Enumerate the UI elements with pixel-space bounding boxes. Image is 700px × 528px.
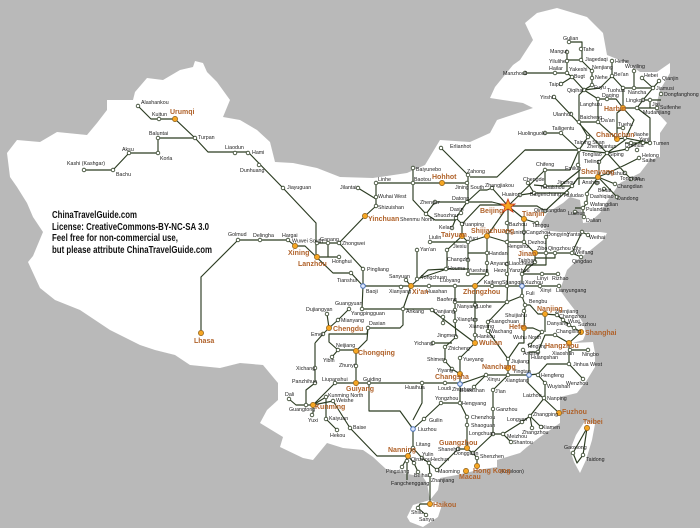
station labels: Shimen xyxy=(427,357,445,363)
station labels: Qianjin xyxy=(662,76,679,82)
station labels: Shenzhen xyxy=(480,454,504,460)
station labels: Qinhuangdao xyxy=(534,208,566,214)
station labels: Weifang xyxy=(574,250,593,256)
major city labels: Jinan xyxy=(518,251,536,258)
major city labels: Xining xyxy=(288,250,309,257)
station labels: Maoming xyxy=(438,469,460,475)
station labels: Fuyu xyxy=(594,85,606,91)
major city labels: Chongqing xyxy=(358,350,395,357)
license note: ChinaTravelGuide.com xyxy=(52,209,137,221)
station labels: Anshan xyxy=(582,180,600,186)
station labels: Zhenglantun xyxy=(587,144,617,150)
station labels: Helong xyxy=(642,153,659,159)
station labels: Yantai xyxy=(567,232,582,238)
station labels: Tuehu xyxy=(618,122,633,128)
station labels: Handan xyxy=(489,251,508,257)
station labels: Guiding xyxy=(363,377,381,383)
station labels: Meizhou xyxy=(507,434,527,440)
station labels: Dujiangyan xyxy=(306,307,333,313)
rail lines: north china xyxy=(362,148,598,343)
station labels: Nancha xyxy=(628,90,646,96)
station labels: Hekou xyxy=(330,433,345,439)
license note xyxy=(52,209,212,256)
station labels: Yiyang xyxy=(437,368,453,374)
station labels: Fangchenggang xyxy=(391,481,429,487)
station labels: Tanggu xyxy=(532,223,549,229)
station labels: Xichang xyxy=(296,366,315,372)
station labels: Taishan xyxy=(518,258,536,264)
station labels: Yanzhou xyxy=(509,268,530,274)
station labels: Nanyang xyxy=(457,304,478,310)
station labels: Weihai xyxy=(589,235,605,241)
station labels: Jiamusi xyxy=(656,86,674,92)
station labels: Taipi xyxy=(549,82,560,88)
station labels: Taiping Shan xyxy=(574,140,605,146)
station labels: Emilun xyxy=(565,166,581,172)
major city labels: Haikou xyxy=(433,502,456,509)
rail lines: northeast xyxy=(525,42,661,217)
station labels: Dunhuang xyxy=(240,168,265,174)
station labels: Xiangyang xyxy=(469,324,494,330)
station labels: Jiagedaqi xyxy=(585,57,608,63)
station labels: Huaihua xyxy=(405,385,425,391)
major city labels: Hefei xyxy=(509,324,526,331)
station labels: Daqing xyxy=(602,93,619,99)
station labels: Tongchuan xyxy=(421,275,447,281)
station labels: (Kowloon) xyxy=(500,469,524,475)
station labels: Ankang xyxy=(406,309,424,315)
station labels: Xianyang xyxy=(389,289,411,295)
station labels: Zhanjiang xyxy=(431,478,454,484)
station labels: Huashan xyxy=(426,289,447,295)
station labels: Hami xyxy=(252,150,264,156)
station labels: Liulin xyxy=(429,235,441,241)
station labels: Beitai xyxy=(598,188,611,194)
station labels: Wuxi xyxy=(568,319,580,325)
major city labels: Changchun xyxy=(596,132,634,139)
station labels: Guangyuan xyxy=(335,301,362,307)
station labels: Yebaishou xyxy=(540,185,565,191)
station labels: Nehe xyxy=(595,75,608,81)
station labels: Luohe xyxy=(477,304,492,310)
station labels: Xiangfan xyxy=(457,317,478,323)
station labels: Tieling xyxy=(584,159,599,165)
station labels: Xiangtang xyxy=(505,378,529,384)
station labels: Wuhu North xyxy=(513,335,541,341)
station labels: Wuyishan xyxy=(547,384,570,390)
station labels: Lianyungang xyxy=(556,288,586,294)
station labels: Rizhao xyxy=(552,276,569,282)
station labels: Gaoxiong xyxy=(564,445,587,451)
station labels: Zhenger xyxy=(420,200,440,206)
station labels: Zhuzhou xyxy=(452,387,473,393)
station labels: Houma xyxy=(448,266,465,272)
station labels: Wuyiling xyxy=(625,64,645,70)
major city labels: Hong Kong xyxy=(473,468,511,475)
major city labels: Fuzhou xyxy=(562,409,587,416)
station labels: Baise xyxy=(353,425,366,431)
station labels: Turpan xyxy=(198,135,215,141)
station labels: Hargai xyxy=(282,233,298,239)
station labels: Chengde xyxy=(523,177,545,183)
station labels: Zhangjiakou xyxy=(485,183,514,189)
station labels: Shantou xyxy=(513,440,533,446)
station labels: Hailar xyxy=(549,66,563,72)
station labels: Yulin xyxy=(422,452,434,458)
station labels: Jinhua West xyxy=(573,362,603,368)
station labels: Kuitun xyxy=(152,112,167,118)
major city labels: Hohhot xyxy=(432,174,457,181)
license note: but please attribute ChinaTravelGuide.com xyxy=(52,244,212,256)
major city labels: Macau xyxy=(459,474,481,481)
station labels: Luoyang xyxy=(440,278,460,284)
station labels: Daxian xyxy=(369,321,386,327)
station labels: Changxing xyxy=(556,329,581,335)
station labels: Lushun xyxy=(568,211,585,217)
station labels: Yuxi xyxy=(308,418,318,424)
license note: Feel free for non-commercial use, xyxy=(52,232,178,244)
station labels: Ji'an xyxy=(634,177,645,183)
major city labels: Kunming xyxy=(315,404,345,411)
station labels: Delingha xyxy=(253,233,274,239)
station labels: Yingtan xyxy=(513,369,531,375)
station labels: Neijiang xyxy=(336,343,355,349)
station labels: Huangchuan xyxy=(489,319,519,325)
station labels: Shangqiu xyxy=(502,280,524,286)
station labels: Tongling xyxy=(527,344,547,350)
station labels: Heze xyxy=(494,268,506,274)
rail lines: northwest xyxy=(84,106,467,333)
station labels: Sanyuan xyxy=(389,274,410,280)
station labels: Gulian xyxy=(563,36,578,42)
station labels: Litang xyxy=(416,442,430,448)
station labels: Kunming North xyxy=(328,393,363,399)
station labels: Changdian xyxy=(617,184,643,190)
station labels: Hengshui xyxy=(507,244,529,250)
major city labels: Nanning xyxy=(388,447,416,454)
station labels: Tahe xyxy=(583,47,595,53)
station labels: Tongliao xyxy=(582,152,602,158)
station labels: Baicheng xyxy=(580,115,602,121)
major city labels: Nanjing xyxy=(537,306,563,313)
station labels: Qinzhou xyxy=(411,457,431,463)
station labels: Zhunyi xyxy=(339,363,355,369)
station labels: Loudi xyxy=(438,386,451,392)
station labels: Jiayuguan xyxy=(287,185,311,191)
station labels: Erlianhot xyxy=(450,144,471,150)
major city labels: Harbin xyxy=(604,106,626,113)
station labels: Tonghua xyxy=(620,176,640,182)
station labels: Sanya xyxy=(419,517,434,523)
rail lines: central and east xyxy=(327,286,588,466)
major city labels: Wuhan xyxy=(479,340,502,347)
station labels: Tuohua xyxy=(607,88,625,94)
major city markers xyxy=(172,105,626,507)
station labels: Ganzhou xyxy=(496,407,518,413)
major city labels: Shenyang xyxy=(581,169,614,176)
station labels: Panzhihua xyxy=(292,379,317,385)
station labels: Baotou xyxy=(414,177,431,183)
station labels: Kelan xyxy=(439,225,453,231)
station labels: Liaodun xyxy=(225,145,244,151)
major city labels: Zhengzhou xyxy=(463,289,500,296)
station labels: Korla xyxy=(160,156,172,162)
station labels: Laizhou xyxy=(523,393,542,399)
station labels: Cangzhou xyxy=(526,230,550,236)
station labels: Wenzhou xyxy=(566,381,588,387)
station labels: Dalian xyxy=(586,218,601,224)
station labels: Tumen xyxy=(653,141,669,147)
station labels: Zhenjiang xyxy=(555,309,578,315)
station labels: Wuhai West xyxy=(378,194,407,200)
station labels: Tailigentu xyxy=(552,126,574,132)
station labels: Guilin xyxy=(429,418,443,424)
icon: beijing capital star xyxy=(501,199,515,212)
station labels: Guangtong xyxy=(289,407,315,413)
station labels: Yuci xyxy=(468,236,478,242)
station labels: Xiaoshan xyxy=(552,351,574,357)
station labels: Baofeng xyxy=(437,297,457,303)
station labels: Nanping xyxy=(547,396,567,402)
station labels: Taidong xyxy=(586,457,605,463)
station labels: Wafangdian xyxy=(590,202,618,208)
station labels: Pingxiang xyxy=(386,469,409,475)
station labels: Baigenchang xyxy=(530,192,561,198)
station labels: Jixi xyxy=(652,102,660,108)
station labels: Kaifeng xyxy=(484,280,502,286)
station labels: Zibo xyxy=(537,246,547,252)
station labels: Yueshan xyxy=(468,268,489,274)
station labels: Yibin xyxy=(323,358,335,364)
station labels: Bugt xyxy=(574,74,585,80)
station labels: Jilantai xyxy=(340,185,356,191)
station labels: Dongguan xyxy=(454,451,479,457)
station labels: Shuozhou xyxy=(434,213,458,219)
station labels: Alashankou xyxy=(141,100,169,106)
major city labels: Urumqi xyxy=(170,109,195,116)
station labels: Langhutu xyxy=(580,102,602,108)
station labels: Hankou xyxy=(477,334,495,340)
station labels: Dongfanghong xyxy=(664,92,699,98)
station labels: Fushun xyxy=(608,171,626,177)
station labels: Jining South xyxy=(455,185,484,191)
station labels: Dongying xyxy=(547,232,569,238)
station labels: Siping xyxy=(609,152,624,158)
station labels: Shenmu North xyxy=(400,217,434,223)
station labels: Yueyang xyxy=(463,357,484,363)
station labels: Bei'an xyxy=(614,72,629,78)
station labels: Beihai xyxy=(414,473,429,479)
major city labels: Hangzhou xyxy=(545,343,579,350)
station labels: Pulandian xyxy=(586,207,610,213)
station labels: Lingkou xyxy=(626,98,645,104)
major city labels: Lanzhou xyxy=(298,261,327,268)
station labels: Mangui xyxy=(550,49,567,55)
station labels: Yan'an xyxy=(420,247,436,253)
station labels: Shizuishan xyxy=(378,205,404,211)
station labels: Baluntai xyxy=(149,131,168,137)
station labels: Jiujiang xyxy=(511,359,529,365)
major city labels: Changsha xyxy=(435,374,469,381)
station labels: Yilulihe xyxy=(549,59,566,65)
station labels: Emei xyxy=(311,332,323,338)
station labels: Zahong xyxy=(467,169,485,175)
station labels: Huangshan xyxy=(531,355,558,361)
station labels: Aksu xyxy=(122,147,134,153)
station labels: Dezhou xyxy=(528,240,546,246)
station labels: Bachu xyxy=(116,172,131,178)
station labels: Linyi xyxy=(537,276,548,282)
station labels: Suzhou xyxy=(578,322,596,328)
station labels: Xuzhou xyxy=(525,280,543,286)
station labels: Shaoguan xyxy=(471,423,495,429)
station labels: Hechun xyxy=(431,457,449,463)
station labels: Jiexiu xyxy=(453,244,467,250)
major city labels: Nanchang xyxy=(482,364,516,371)
station labels: Xiamen xyxy=(542,425,560,431)
station labels: J'ian xyxy=(495,389,506,395)
major city labels: Chengdu xyxy=(333,326,363,333)
station labels: Wuwei South xyxy=(292,238,323,244)
station labels: Fuli xyxy=(526,291,535,297)
station labels: Zhicheng xyxy=(448,346,470,352)
station labels: Yichang xyxy=(414,341,433,347)
station labels: Yanji xyxy=(639,137,650,143)
station labels: Hengyang xyxy=(462,401,486,407)
station labels: Dashiqiao xyxy=(590,194,614,200)
station labels: Weishe xyxy=(336,398,354,404)
station labels: Ningbo xyxy=(582,352,599,358)
major city labels: Guangzhou xyxy=(439,440,478,447)
station labels: Kaiyuan xyxy=(329,416,348,422)
major city labels: Shijiazhuang xyxy=(471,228,514,235)
station labels: Chenzhou xyxy=(471,415,495,421)
station labels: Zhangzhou xyxy=(522,430,549,436)
station labels: Da'an xyxy=(601,118,615,124)
station labels: Honghui xyxy=(332,259,352,265)
stations xyxy=(82,40,663,517)
station labels: Baoji xyxy=(366,289,378,295)
station labels: Danjiang xyxy=(434,309,455,315)
station labels: Mianyang xyxy=(341,318,364,324)
interchange stations xyxy=(361,284,531,431)
station labels: Yuanping xyxy=(462,222,484,228)
station labels: Datong xyxy=(452,196,469,202)
station labels: Mudanjiang xyxy=(643,110,670,116)
major city labels: Lhasa xyxy=(194,338,214,345)
station labels: Dali xyxy=(285,392,294,398)
station labels: Danyang xyxy=(547,321,568,327)
station labels: Zhangping xyxy=(533,412,558,418)
station labels: Yongzhou xyxy=(435,396,458,402)
station labels: Shuijiahu xyxy=(505,313,527,319)
station labels: Liuzhou xyxy=(418,427,437,433)
station labels: Manzhouli xyxy=(503,71,527,77)
station labels: Bazhou xyxy=(509,222,527,228)
station labels: Longyan xyxy=(507,417,527,423)
major city labels: Taibei xyxy=(583,419,603,426)
station labels: Wachang xyxy=(490,329,512,335)
station labels: Saihe xyxy=(642,158,656,164)
station labels: Chifeng xyxy=(536,162,554,168)
station labels: Changzhi xyxy=(447,257,469,263)
station labels: Anyang xyxy=(490,261,508,267)
station labels: Baiyunebo xyxy=(416,167,441,173)
station labels: Hebei xyxy=(644,73,658,79)
station labels: Nenjiang xyxy=(592,65,613,71)
taiwan island xyxy=(570,421,595,473)
major city labels: Tianjin xyxy=(522,211,544,218)
station labels: Tianshui xyxy=(337,278,357,284)
station labels: Yirshi xyxy=(540,95,553,101)
station labels: Pingliang xyxy=(367,267,389,273)
station labels: Dandong xyxy=(617,196,639,202)
station labels: Qingzhou City xyxy=(548,246,582,252)
station labels: Dunhua xyxy=(625,143,644,149)
station labels: Zhongwei xyxy=(342,241,365,247)
major city labels: Taiyuan xyxy=(441,232,467,239)
station labels: Golmud xyxy=(228,232,247,238)
major city labels xyxy=(170,106,634,509)
station labels: Huludao xyxy=(564,193,584,199)
station labels: Huolinguole xyxy=(518,131,546,137)
station labels: Bengbu xyxy=(529,299,547,305)
major city labels: Guiyang xyxy=(346,386,374,393)
station labels: Shilu xyxy=(411,510,423,516)
station labels: Suning xyxy=(509,230,526,236)
station labels: Liupanshui xyxy=(322,377,348,383)
station labels: Anqing xyxy=(523,351,540,357)
station labels: Ganang xyxy=(320,237,339,243)
station labels: Shanehui xyxy=(438,447,460,453)
station labels: Yakeshi xyxy=(569,67,587,73)
station labels: Jingmen xyxy=(437,333,457,339)
station labels: Buakishan xyxy=(460,388,485,394)
station labels: Jiaohe xyxy=(633,132,649,138)
station labels: Kashi (Kashgar) xyxy=(67,161,105,167)
station labels: Liaocheng xyxy=(509,261,534,267)
license note: License: CreativeCommons-BY-NC-SA 3.0 xyxy=(52,221,209,233)
station labels: Heihe xyxy=(615,59,629,65)
station labels: Daxin xyxy=(450,207,464,213)
major city labels: Yinchuan xyxy=(368,216,399,223)
station labels: Qiqihar xyxy=(567,88,584,94)
rail lines: southwest and south xyxy=(289,328,587,515)
station labels: Xinyi xyxy=(540,288,551,294)
station labels: Yangpingguan xyxy=(351,311,385,317)
station labels: Hengfeng xyxy=(541,373,564,379)
station labels: Qingdao xyxy=(572,259,592,265)
major city labels: Beijing xyxy=(480,208,503,215)
station labels: Ulanhot xyxy=(553,112,572,118)
station labels: Longchuan xyxy=(469,431,495,437)
station labels: Suifenhe xyxy=(660,105,681,111)
major city labels: Shanghai xyxy=(585,330,617,337)
station labels: Changzhou xyxy=(559,314,586,320)
station labels: Xinyu xyxy=(487,377,500,383)
station labels: Linhe xyxy=(378,177,391,183)
hainan island xyxy=(407,500,442,527)
major city labels: Xi'an xyxy=(412,289,428,296)
station labels: Huairou xyxy=(502,192,521,198)
station labels: Jinzhou xyxy=(557,180,575,186)
